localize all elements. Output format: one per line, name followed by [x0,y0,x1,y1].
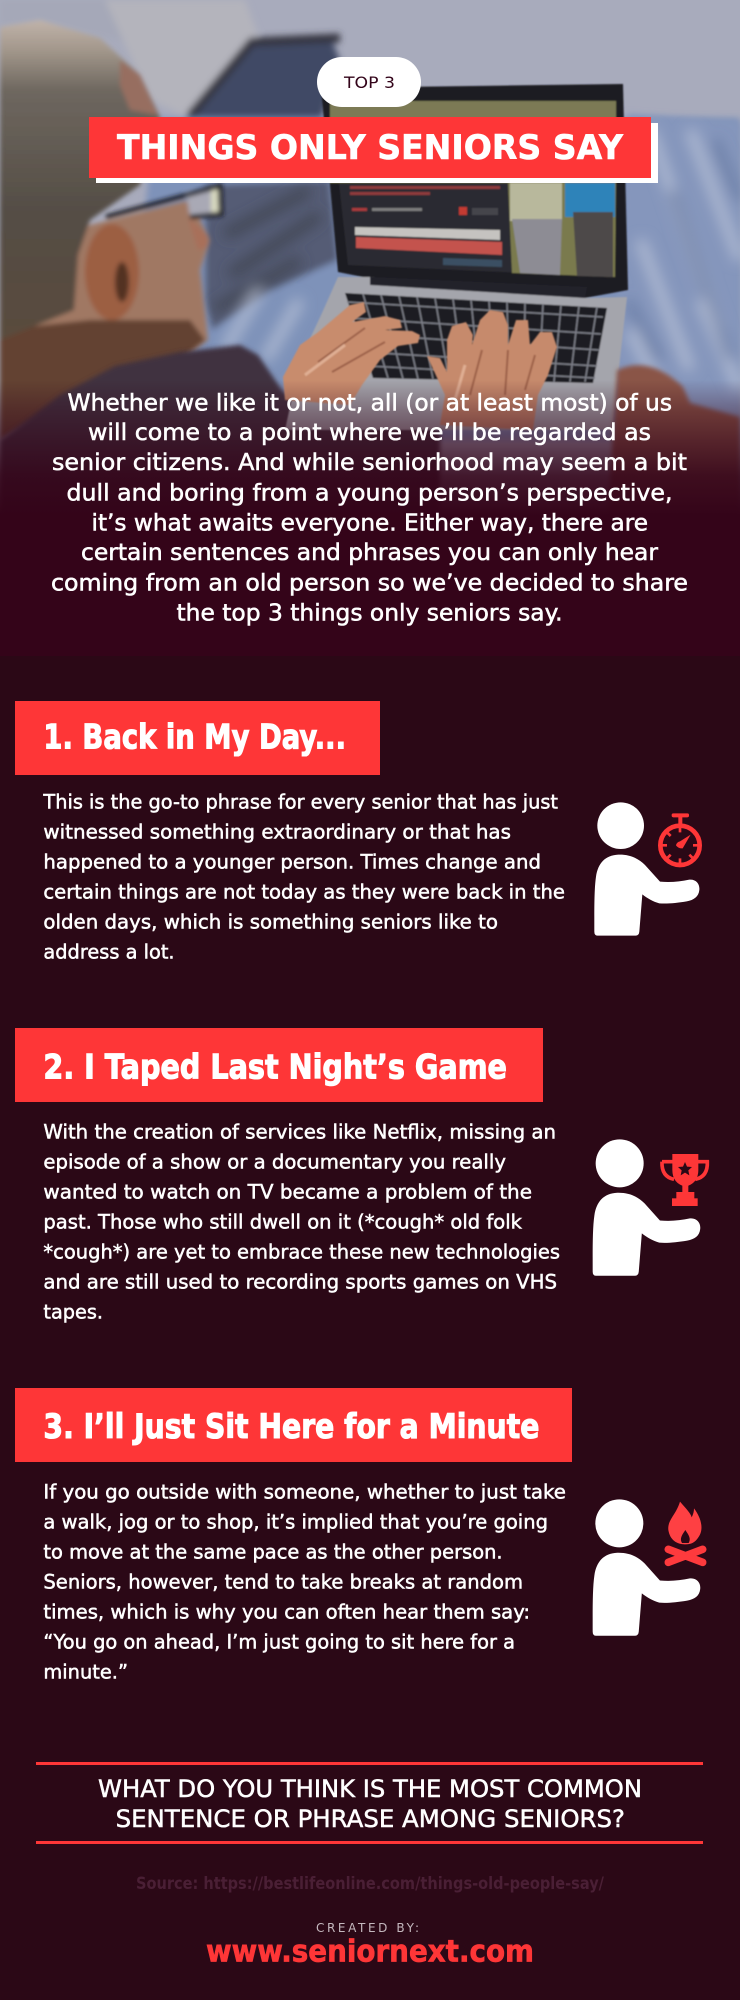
section 1 heading [15,701,380,775]
icon: person with campfire [593,1499,703,1636]
pill: top 3: TOP 3 [343,73,395,92]
website url: www.seniornext.com [206,1935,534,1970]
title banner: THINGS ONLY SENIORS SAY [117,128,624,167]
section 1 body: This is the go-to phrase for every senior that has just [42,790,558,813]
icon: person with trophy [593,1139,707,1276]
section 3 body: Seniors, however, tend to take breaks at random [43,1571,523,1594]
intro text: will come to a point where we’ll be regarded as [88,420,651,446]
hero photo: senior man using a laptop [0,0,740,660]
section 3 body: “You go on ahead, I’m just going to sit here for a [43,1630,515,1654]
section 1 body: address a lot. [43,941,175,964]
section 1 heading: 1. Back in My Day... [43,718,346,757]
intro text [51,390,688,626]
section 2 body: episode of a show or a documentary you really [43,1151,506,1174]
shirt [0,345,440,560]
section 2 body [43,1120,560,1324]
man [0,20,222,440]
source line: Source: https://bestlifeonline.com/things-old-people-say/ [136,1874,605,1893]
dark gradient overlay [0,380,740,660]
section 3 heading: 3. I’ll Just Sit Here for a Minute [43,1407,539,1446]
section 2 body: *cough*) are yet to embrace these new technologies [43,1241,560,1264]
laptop [285,84,628,430]
closing question with rules: SENTENCE OR PHRASE AMONG SENIORS? [116,1805,625,1833]
intro text: senior citizens. And while seniorhood may seem a bit [52,450,687,476]
section 1 body: certain things are not today as they were back in the [43,880,565,903]
pill: top 3 [317,57,421,107]
section background [0,656,740,2000]
section 3 heading [15,1388,572,1462]
intro text: coming from an old person so we’ve decided to share [51,570,688,596]
created by label: CREATED BY: [316,1921,419,1935]
section 2 body: wanted to watch on TV became a problem of the [43,1180,532,1204]
section 3 body: times, which is why you can often hear them say: [43,1601,530,1624]
hands [283,302,557,430]
section 3 body: minute.” [43,1660,128,1683]
section 3 body: to move at the same pace as the other person. [43,1540,503,1563]
icon: person with stopwatch [594,802,700,936]
section 2 heading [15,1028,543,1102]
section 2 body: tapes. [43,1300,103,1324]
section 3 body: If you go outside with someone, whether to just take [43,1481,566,1504]
section 1 body: happened to a younger person. Times change and [43,850,541,874]
intro text: Whether we like it or not, all (or at least most) of us [68,390,672,416]
intro text: it’s what awaits everyone. Either way, there are [92,510,648,536]
section 2 body: With the creation of services like Netflix, missing an [43,1120,556,1143]
section 3 body [43,1481,566,1683]
intro text: certain sentences and phrases you can only hear [81,540,659,566]
title banner [89,117,658,183]
section 1 body: olden days, which is something seniors like to [43,911,498,934]
closing question with rules: WHAT DO YOU THINK IS THE MOST COMMON [98,1775,642,1803]
section 2 body: and are still used to recording sports games on VHS [43,1271,557,1294]
section 1 body [42,790,565,964]
section 3 body: a walk, jog or to shop, it’s implied that you’re going [43,1510,548,1534]
section 2 heading: 2. I Taped Last Night’s Game [43,1048,507,1087]
intro text: dull and boring from a young person’s perspective, [66,480,672,506]
closing question with rules [36,1762,703,1844]
section 2 body: past. Those who still dwell on it (*cough* old folk [43,1210,523,1233]
knee [605,365,740,560]
intro text: the top 3 things only seniors say. [176,600,562,626]
section 1 body: witnessed something extraordinary or that has [43,821,511,844]
